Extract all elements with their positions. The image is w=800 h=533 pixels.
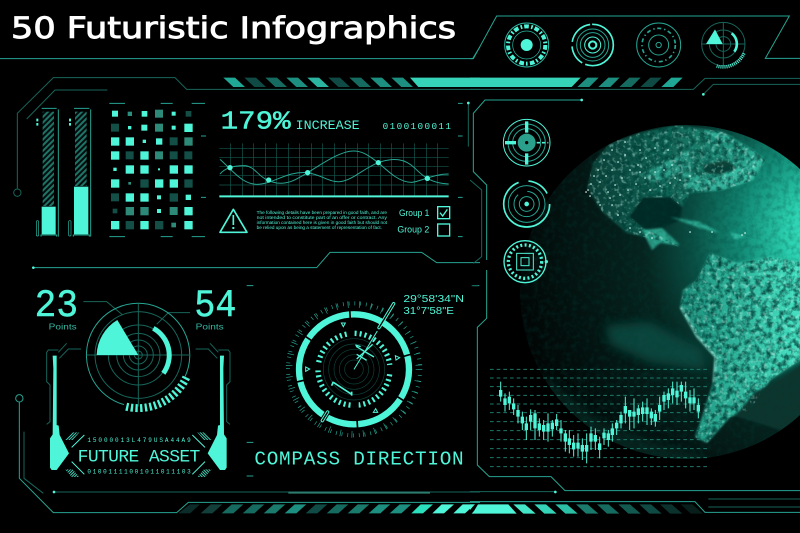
southern pacific limb [546,379,696,459]
serial row top: 15000013L479USA44A9 [87,437,191,444]
stripe rails [470,78,800,94]
disclaimer text: information contained here is given in good faith but should not [257,220,388,225]
hudson bay [703,160,738,175]
points label right: Points [196,321,224,331]
top stripes [223,78,480,87]
bottom divider [470,491,800,512]
city lights [586,142,745,238]
frame marker [14,189,21,196]
serial row bottom: 01001111001011011103 [87,469,191,476]
globe-wide haze texture [520,125,800,459]
candlestick chart [501,382,698,463]
coordinates: 31°7'58"E [403,306,455,317]
binary label: 0100100011 [383,121,451,132]
caribbean and central america [642,217,745,250]
cloud patches [640,130,760,192]
bar gauge 2 [69,108,91,237]
south america [680,253,800,443]
lower right section [470,270,800,514]
frame dots [580,93,705,101]
bottom stripes right [470,504,703,514]
dark inner trace [470,180,482,263]
warning icon [220,209,247,232]
increase label: INCREASE [296,119,360,134]
left bracket [47,343,84,477]
line chart [219,143,449,197]
north america [587,125,765,247]
upper left frame [17,78,480,188]
group 2 legend [397,224,450,236]
icon: target rings [572,24,613,66]
square matrix [111,110,193,229]
icon: dial [637,23,681,67]
globe frame [473,100,582,260]
earth globe [520,125,800,470]
compass [288,303,420,435]
disclaimer text: not intended to constitute part of an offer or contract. Any [257,215,388,220]
group 1 legend [399,207,450,219]
lower left frame [16,395,480,513]
icon: reactor [505,23,549,67]
lower divider [32,102,480,269]
value 23: 23 [35,283,78,328]
land texture [588,125,800,442]
disclaimer text: be relied upon as being a statement of representation of fact. [257,225,382,230]
title: 50 Futuristic Infographics [11,11,456,45]
pacific cloud swirl [605,322,705,370]
future asset label: FUTURE ASSET [78,447,201,467]
gulf of mexico [630,198,682,228]
coordinates [403,294,464,317]
frame tick [472,284,478,287]
bottom stripes [178,504,480,513]
icon: orbit disc [504,181,550,227]
andes coast highlight [681,307,716,382]
percent value: 179% [221,107,291,137]
bar gauge 1 [36,108,58,237]
lower globe frame [477,270,800,491]
leader lines [83,302,190,324]
disclaimer text [257,210,388,230]
right side frame and top icons [470,16,800,283]
compass direction label: COMPASS DIRECTION [254,448,464,470]
icon frame [470,16,800,59]
group 1 legend: Group 1 [399,208,429,218]
value 54: 54 [194,283,236,328]
right panel trace [467,103,470,147]
southern ocean [735,364,800,430]
radar chart [86,303,190,408]
compass ticks [247,286,479,476]
coordinates: 29°58'34"N [403,294,464,305]
group 2 legend: Group 2 [397,225,429,235]
stripes continuation [470,78,683,87]
inner frame trace [27,90,107,119]
lower left dashboard [16,283,480,513]
panel tick marks [109,103,463,237]
candlestick grid [490,369,708,467]
header rule [0,47,480,59]
icon: gear disc [504,241,548,283]
icon: radar [702,22,745,67]
left dashboard [0,47,480,269]
points label left: Points [49,321,77,331]
right bracket [192,343,230,477]
disclaimer text: The following details have been prepared in good faith, and are [257,210,387,215]
icon: crosshair disc [503,119,550,166]
